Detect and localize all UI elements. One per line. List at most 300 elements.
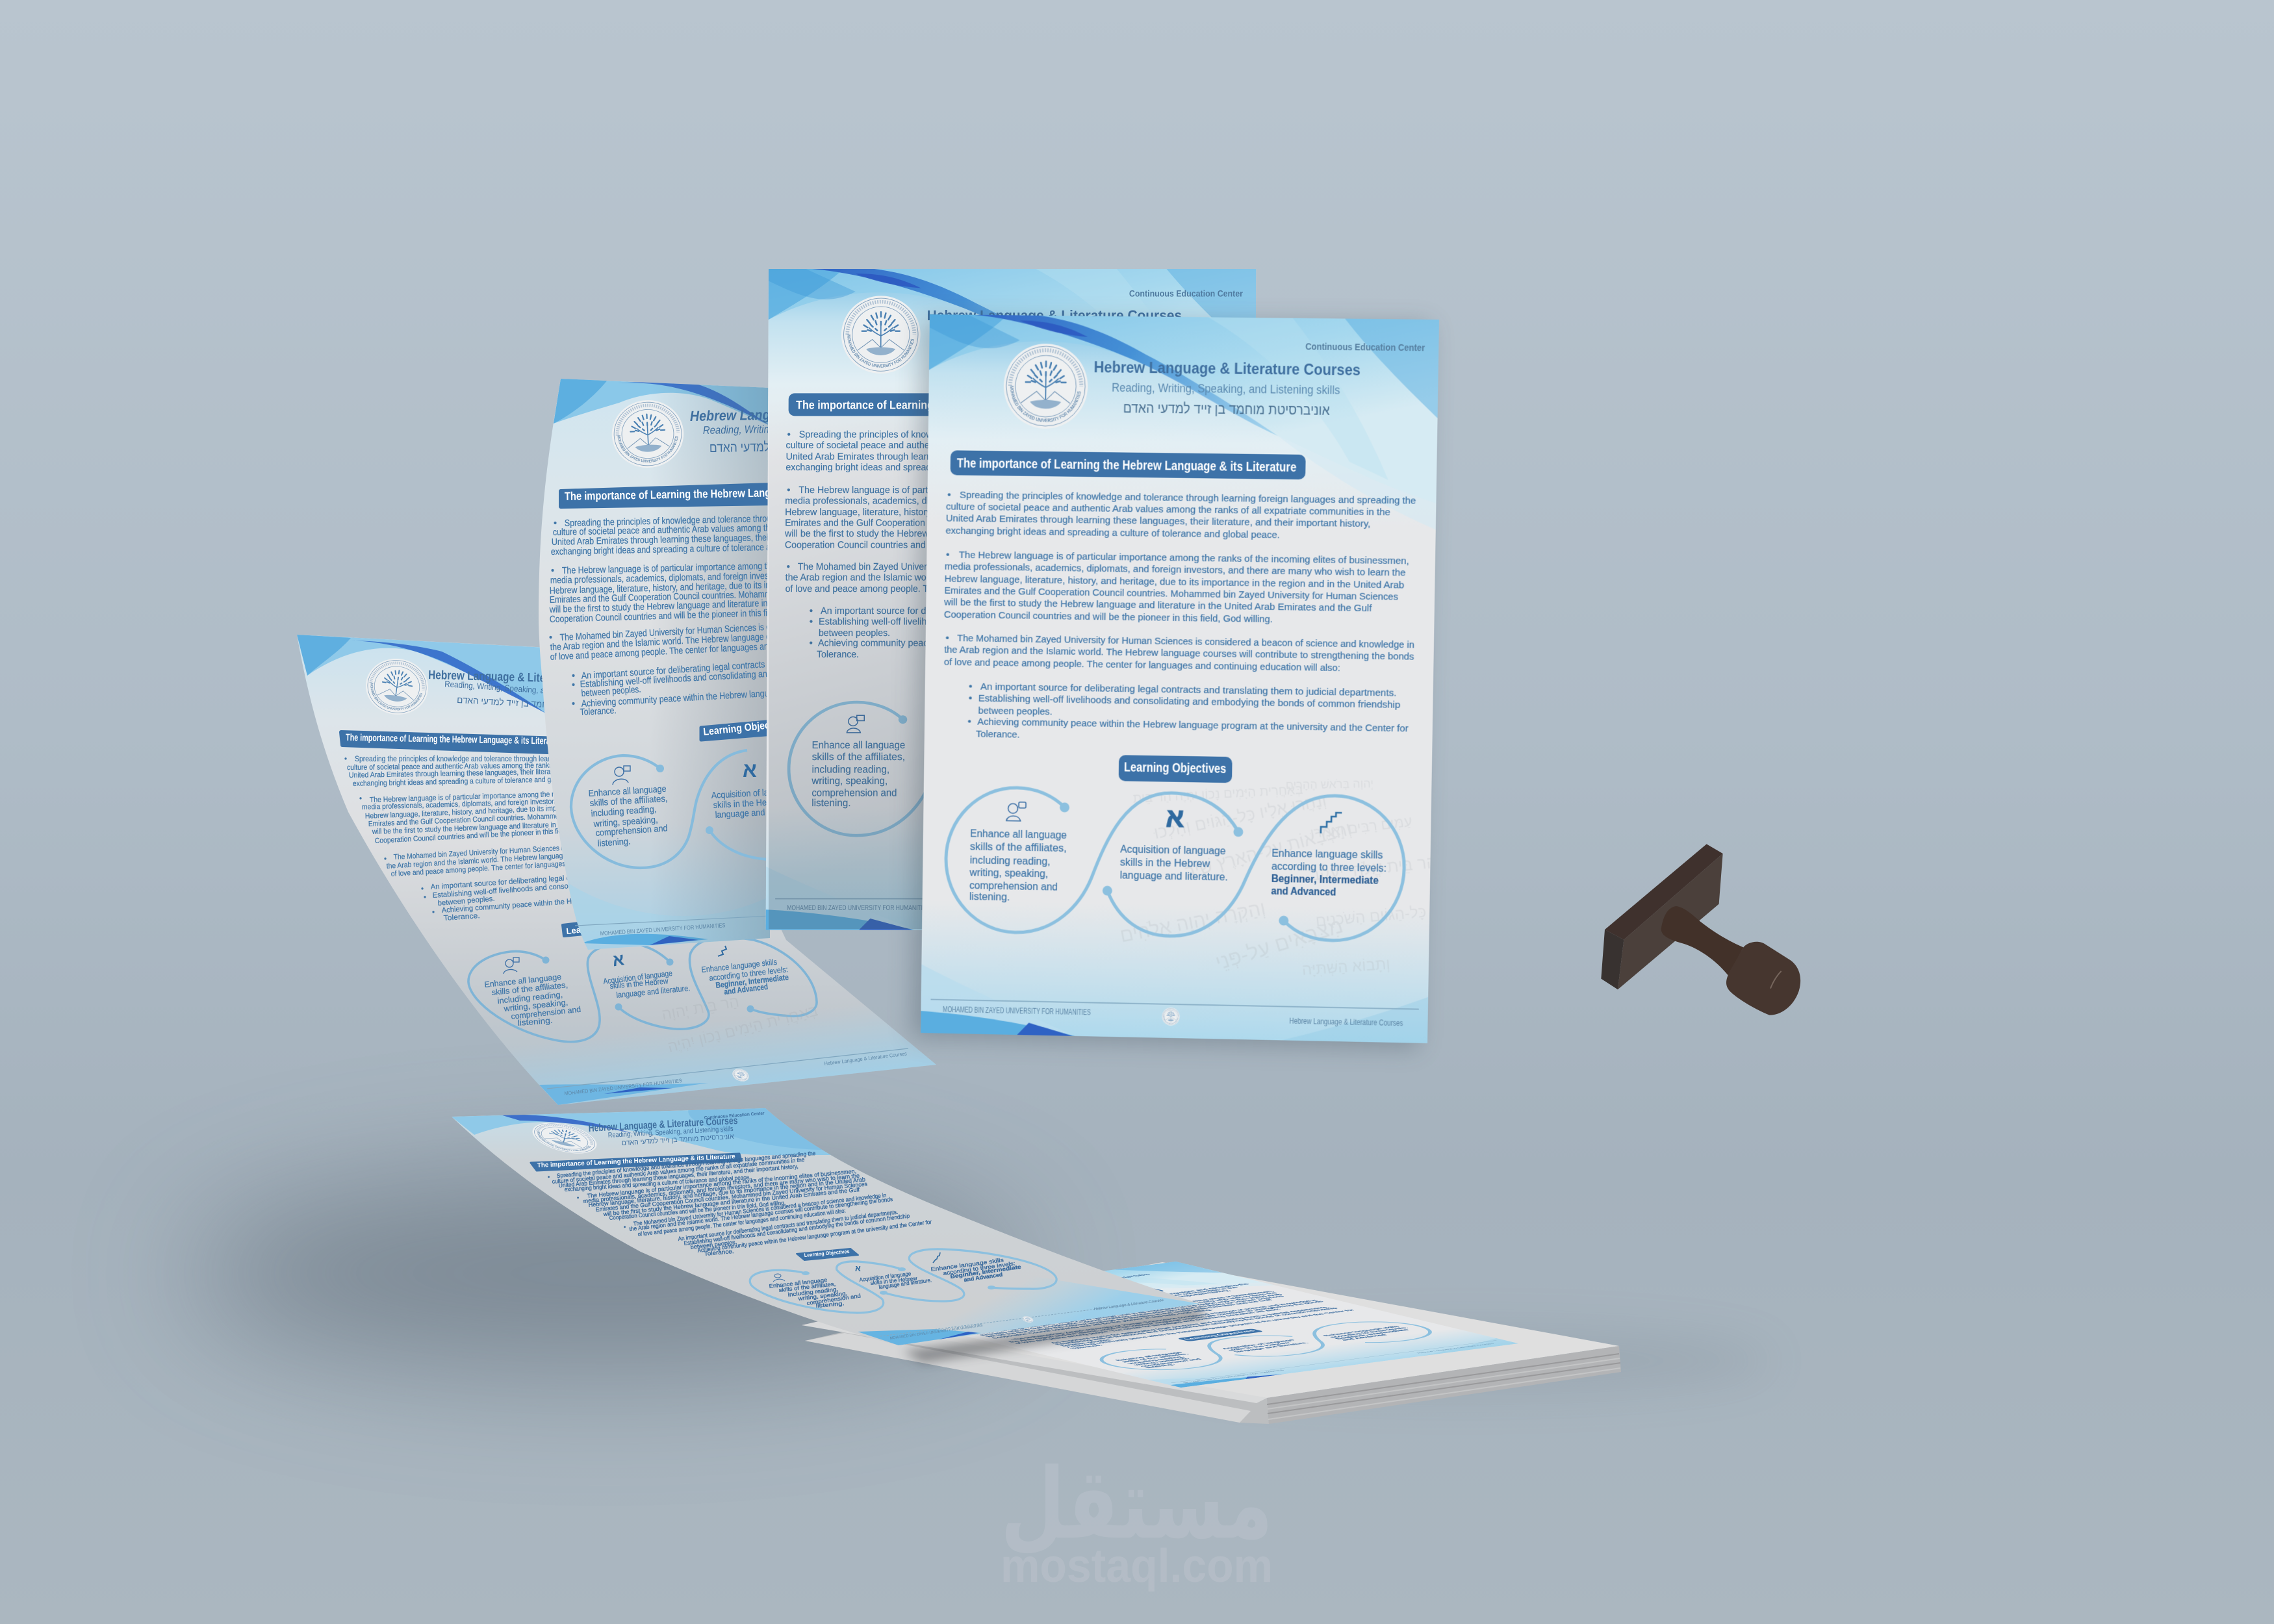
back sheet body text: will be the first to study the Hebrew language and literature in the United Arab Emirates and the Gulf (784, 528, 1195, 539)
left sheet body text: Cooperation Council countries and will be the pioneer in this field, God willing. (375, 825, 606, 845)
sheet body text (977, 1284, 1354, 1349)
left sheet body text: Emirates and the Gulf Cooperation Council countries. Mohammed bin Zayed University for Human Sciences (368, 807, 687, 828)
left sheet body text: of love and peace among people. The center for languages and continuing education will also: (390, 854, 669, 878)
second sheet body text: Spreading the principles of knowledge and tolerance through learning foreign languages and spreading the (565, 510, 943, 529)
objective 3 text: and Advanced (1270, 883, 1333, 896)
curved sheet body text (548, 1150, 932, 1257)
body text: The Hebrew language is of particular importance among the ranks of the incoming elites of businessmen, (960, 550, 1401, 564)
second sheet loop text: Acquisition of language (711, 785, 796, 800)
sheet: second from back, slightly curved (539, 379, 943, 950)
sheet body text: will be the first to study the Hebrew language and literature in the United Arab Emirates and the Gulf (984, 1299, 1275, 1338)
curved sheet seal (530, 1117, 600, 1159)
curved sheet loop text: skills of the affiliates, (778, 1280, 836, 1293)
left sheet footer: Hebrew Language & Literature Courses (824, 1050, 907, 1067)
curved sheet body text: United Arab Emirates through learning these languages, their literature, and their important history, (558, 1163, 798, 1189)
body text: Hebrew language, literature, history, and heritage, due to its importance in the region and in the United Arab (946, 574, 1397, 588)
sheet body text: The Hebrew language is of particular importance among the ranks of the incoming elites of businessmen, (971, 1290, 1276, 1331)
back sheet body text: Achieving community peace within the Hebrew language program at the university and the Center for (818, 638, 1231, 648)
back sheet body text: Tolerance. (817, 649, 859, 660)
sheet objectives text: skills of the affiliates, (1120, 1353, 1190, 1363)
body text: between peoples. (980, 707, 1053, 718)
back sheet footer: MOHAMED BIN ZAYED UNIVERSITY FOR HUMANITIES (787, 904, 930, 912)
objective 2 text: Acquisition of language (1121, 843, 1225, 857)
left sheet body text: An important source for deliberating legal contracts and translating them to judicial departments. (430, 863, 742, 891)
curved sheet loop text: Enhance all language (769, 1276, 828, 1289)
second sheet loop icons: א (743, 758, 757, 781)
back sheet artwork (766, 269, 1256, 930)
sheet objectives text: Beginner, Intermediate (1334, 1329, 1411, 1339)
back sheet body text: Establishing well-off livelihoods and consolidating and embodying the bonds of common friendship (819, 616, 1223, 627)
curved sheet loop text: language and literature. (878, 1276, 932, 1290)
left sheet body text: • (359, 795, 362, 803)
second sheet seal (610, 398, 685, 470)
second sheet loop text: comprehension and (595, 822, 668, 838)
back sheet titles: Hebrew Language & Literature Courses (927, 308, 1182, 324)
left sheet body text: between peoples. (437, 895, 495, 907)
sheet body text: Achieving community peace within the Hebrew language program at the university and the Center for (1064, 1309, 1357, 1348)
body text: of love and peace among people. The center for languages and continuing education will also: (946, 658, 1336, 672)
second sheet body text: culture of societal peace and authentic Arab values among the ranks of all expatriate communities in the (553, 520, 923, 538)
paper stack (802, 1262, 1621, 1424)
curved sheet objectives pill (797, 1249, 858, 1260)
curved sheet body text: Spreading the principles of knowledge and tolerance through learning foreign languages and spreading the (556, 1150, 816, 1179)
body text: • (971, 682, 974, 694)
curved sheet titles: Hebrew Language & Literature Courses (588, 1115, 738, 1134)
back sheet body text: • (810, 605, 813, 616)
second sheet body text: The Mohamed bin Zayed University for Human Sciences is considered a beacon of science and knowledge in (559, 613, 939, 643)
second sheet loop text: including reading, (591, 804, 657, 818)
sheet objectives text: writing, speaking, (1132, 1358, 1191, 1366)
hebrew script watermark: כָּל-הַגּוֹיִם הַשֹּׁכְנִים (1313, 900, 1423, 929)
body text: • (949, 490, 952, 501)
curved sheet loop text: Acquisition of language (859, 1270, 912, 1283)
body text: An important source for deliberating legal contracts and translating them to judicial departments. (982, 682, 1391, 696)
sheet objectives text: Acquisition of language (1220, 1339, 1297, 1350)
second sheet body text: • (551, 566, 554, 576)
left sheet body text: Spreading the principles of knowledge and tolerance through learning foreign languages and spreading the (355, 755, 674, 763)
left sheet body text: • (384, 856, 387, 863)
curved sheet header (452, 1108, 1200, 1345)
objective 3 text (1271, 847, 1387, 899)
sheet footer text: MOHAMED BIN ZAYED UNIVERSITY FOR HUMANITIES (1182, 1369, 1286, 1384)
left sheet faint hebrew: הַר בֵּית יְהוָה (660, 993, 741, 1024)
left sheet loop text: Acquisition of language (603, 969, 673, 986)
left sheet body text: • (424, 894, 426, 902)
sheet objectives text: including reading, (1127, 1356, 1186, 1364)
body text: Spreading the principles of knowledge and tolerance through learning foreign languages and spreading the (960, 490, 1408, 503)
sheet body text: Tolerance. (1069, 1344, 1105, 1350)
left sheet titles: אוניברסיטת מוחמד בן זייד למדעי האדם (457, 694, 602, 713)
curved sheet body text: Emirates and the Gulf Cooperation Council countries. Mohammed bin Zayed University for Human Sciences (595, 1180, 868, 1213)
left sheet body text: The Mohamed bin Zayed University for Human Sciences is considered a beacon of science and knowledge in (394, 836, 714, 861)
hebrew script watermark: יְהוָה בְּרֹאשׁ הֶהָרִים (1283, 774, 1369, 791)
sheet body text: exchanging bright ideas and spreading a culture of tolerance and global peace. (951, 1299, 1179, 1329)
second sheet body text: of love and peace among people. The center for languages and continuing education will also: (550, 636, 880, 663)
body text: • (970, 718, 973, 729)
sheet body text: culture of societal peace and authentic Arab values among the ranks of all expatriate communities in the (939, 1287, 1240, 1326)
second sheet titles: Reading, Writing, Speaking, and Listening skills (703, 421, 907, 437)
back sheet body text: • (787, 485, 791, 496)
left sheet body text: United Arab Emirates through learning these languages, their literature, and their important history, (349, 767, 646, 780)
hebrew university name: אוניברסיטת מוחמד בן זייד למדעי האדם (1121, 398, 1323, 416)
curved sheet footer (880, 1299, 1164, 1341)
second sheet titles: Hebrew Language & Literature Courses (690, 404, 930, 424)
curved sheet titles: Continuous Education Center (704, 1111, 765, 1121)
curved sheet body text: Achieving community peace within the Hebrew language program at the university and the Center for (697, 1219, 932, 1254)
flyer subtitle: Reading, Writing, Speaking, and Listening skills (1109, 379, 1333, 394)
second sheet loop text: writing, speaking, (593, 814, 658, 829)
curved sheet loop text: writing, speaking, (797, 1289, 848, 1302)
curved sheet loop (750, 1249, 1056, 1313)
sheet title: Hebrew Language & Literature Courses (968, 1273, 1153, 1298)
back sheet body text: • (787, 561, 790, 572)
left sheet loop text (484, 958, 789, 1028)
objective 2 text (1119, 843, 1229, 883)
objective 2 text: language and literature. (1121, 870, 1227, 883)
hebrew script watermark: עַמִּים רַבִּים וְאָמְרוּ (1306, 810, 1408, 840)
second sheet body text (549, 510, 943, 718)
body text: • (971, 694, 974, 705)
curved sheet body text: media professionals, academics, diplomats, and foreign investors, and there are many who wish to learn the (583, 1173, 860, 1204)
body text (941, 489, 1417, 747)
sheet objectives pill (1177, 1328, 1264, 1341)
curved sheet heading: The importance of Learning the Hebrew Language & its Literature (537, 1153, 735, 1169)
hebrew script watermark: וְהַצְּבָאוֹת עַל-הָאָרֶץ שִׁיר (1183, 816, 1350, 882)
flyer title: Hebrew Language & Literature Courses (1092, 358, 1353, 377)
left sheet body text: culture of societal peace and authentic Arab values among the ranks of all expatriate communities in the (347, 761, 659, 772)
left sheet loop text: writing, speaking, (503, 998, 568, 1013)
back sheet body text: Cooperation Council countries and will be the pioneer in this field, God willing. (785, 540, 1101, 551)
learning objectives pill (1119, 755, 1233, 783)
curved sheet body text: An important source for deliberating legal contracts and translating them to judicial departments. (678, 1209, 899, 1242)
second sheet titles: אוניברסיטת מוחמד בן זייד למדעי האדם (709, 438, 895, 455)
curved sheet loop text: according to three levels: (943, 1260, 1016, 1276)
sheet objectives text: Enhance language skills (1322, 1326, 1401, 1337)
sheet objectives text: Enhance all language (1114, 1351, 1184, 1362)
sheet body text: Hebrew language, literature, history, and heritage, due to its importance in the region and in the United Arab (973, 1293, 1284, 1335)
back sheet heading: The importance of Learning the Hebrew Language & its Literature (796, 398, 1122, 411)
second sheet body text: Hebrew language, literature, history, and heritage, due to its importance in the region and in the United Arab (550, 576, 932, 596)
sheet body text: of love and peace among people. The center for languages and continuing education will also: (1013, 1308, 1283, 1344)
left sheet titles (428, 668, 617, 713)
heading pill: The importance of Learning the Hebrew Language & its Literature (958, 457, 1291, 473)
footer: Hebrew Language & Literature Courses (1288, 1016, 1400, 1026)
left sheet body text (344, 755, 766, 922)
left sheet body text: The Hebrew language is of particular importance among the ranks of the incoming elites of businessmen, (370, 787, 685, 804)
second sheet body text: Establishing well-off livelihoods and consolidating and embodying the bonds of common friendship (580, 660, 930, 690)
left sheet loop text: Enhance all language (484, 972, 562, 989)
icon: wooden stamp (1601, 844, 1800, 1015)
curved sheet loop text: Enhance language skills (930, 1256, 1004, 1273)
curved sheet loop text: and Advanced (964, 1271, 1003, 1283)
second sheet body text: The Hebrew language is of particular importance among the ranks of the incoming elites of businessmen, (562, 557, 936, 576)
curved sheet titles: אוניברסיטת מוחמד בן זייד למדעי האדם (621, 1132, 734, 1147)
left sheet body text: Tolerance. (443, 912, 480, 922)
second sheet loop text: language and literature. (715, 805, 802, 820)
left sheet loop text: according to three levels: (709, 965, 789, 983)
curved sheet footer: Hebrew Language & Literature Courses (1093, 1299, 1164, 1312)
body text: Cooperation Council countries and will be the pioneer in this field, God willing. (945, 610, 1269, 623)
back sheet body text: Emirates and the Gulf Cooperation Council countries. Mohammed bin Zayed University for Human Sciences (785, 518, 1220, 529)
back sheet titles (927, 288, 1244, 324)
left sheet body text: Achieving community peace within the Hebrew language program at the university and the Center for (441, 884, 766, 915)
left sheet loop text: including reading, (497, 990, 563, 1006)
curved sheet body text: The Mohamed bin Zayed University for Human Sciences is considered a beacon of science and knowledge in (633, 1192, 887, 1227)
curved sheet body text: Tolerance. (704, 1248, 734, 1257)
curved sheet body text: The Hebrew language is of particular importance among the ranks of the incoming elites of businessmen, (587, 1168, 856, 1199)
second sheet loop icons (613, 758, 757, 785)
left sheet loop text: language and literature. (616, 983, 691, 1000)
left sheet heading: The importance of Learning the Hebrew Language & its Literature (346, 732, 563, 747)
curved sheet body text: • (624, 1224, 626, 1230)
back sheet body text: The Hebrew language is of particular importance among the ranks of the incoming elites of businessmen, (798, 485, 1231, 496)
objective 3 text: according to three levels: (1270, 859, 1383, 872)
sheet body text: media professionals, academics, diplomats, and foreign investors, and there are many who wish to learn the (967, 1292, 1279, 1334)
curved sheet body text: exchanging bright ideas and spreading a culture of tolerance and global peace. (564, 1174, 751, 1193)
hebrew script watermark: וְנָהֲרוּ אֵלָיו כָּל-הַגּוֹיִם וְהָלְכוּ (1152, 789, 1325, 843)
university seal (1003, 343, 1088, 429)
body text: culture of societal peace and authentic Arab values among the ranks of all expatriate communities in the (947, 501, 1383, 515)
back sheet loop text: comprehension and (811, 788, 897, 798)
left sheet loop icons: א (611, 949, 626, 970)
shadow of curved sheet on flat sheet (903, 1308, 1208, 1363)
second sheet body text: between peoples. (581, 685, 641, 699)
watermark logo: مستقل (1001, 1448, 1273, 1561)
back sheet body text: • (810, 616, 813, 627)
left sheet loop text: Beginner, Intermediate (715, 972, 789, 990)
body text: Emirates and the Gulf Cooperation Council countries. Mohammed bin Zayed University for Human Sciences (946, 586, 1392, 600)
ground shadow under sheets (188, 1176, 1774, 1393)
curved sheet body text: • (577, 1195, 579, 1201)
sheet body text: between peoples. (1059, 1339, 1115, 1347)
second sheet body text: • (572, 671, 575, 681)
body text: the Arab region and the Islamic world. The Hebrew language courses will contribute to strengthening the bonds (946, 646, 1408, 659)
sheet footer text: Hebrew Language & Literature Courses (1416, 1343, 1496, 1354)
sheet body text: the Arab region and the Islamic world. The Hebrew language courses will contribute to strengthening the bonds (1007, 1300, 1325, 1343)
back sheet loop text: writing, speaking, (811, 776, 888, 787)
back sheet person icon (847, 715, 864, 733)
objective 1 text (969, 827, 1067, 904)
learning objectives pill: Learning Objectives (1124, 759, 1225, 776)
hebrew script watermark: וְהַקְּרָה יְהוָה אֱלֹהִים (1119, 896, 1266, 948)
second sheet body text: media professionals, academics, diplomats, and foreign investors, and there are many who wish to learn the (550, 568, 934, 586)
back sheet titles: Continuous Education Center (1129, 288, 1244, 298)
hebrew script watermark (1118, 773, 1440, 982)
body text: United Arab Emirates through learning these languages, their literature, and their important history, (947, 513, 1364, 527)
curved sheet loop icons (773, 1252, 940, 1282)
left sheet heading (341, 732, 585, 754)
second sheet body text: will be the first to study the Hebrew language and literature in the United Arab Emirates and the Gulf (549, 594, 906, 615)
back sheet heading (789, 393, 1134, 416)
back sheet body text: exchanging bright ideas and spreading a culture of tolerance and global peace. (786, 462, 1106, 473)
second sheet objectives pill: Learning Objectives (703, 718, 791, 738)
left sheet loop text: listening. (517, 1016, 553, 1028)
left sheet loop icons (504, 946, 726, 974)
sheet body text: Emirates and the Gulf Cooperation Council countries. Mohammed bin Zayed University for Human Sciences (978, 1295, 1286, 1336)
back sheet loop text (811, 740, 905, 809)
left sheet body text: • (432, 909, 435, 917)
back sheet body text: between peoples. (819, 628, 890, 639)
heading pill (951, 450, 1306, 479)
sheet objectives text: skills in the Hebrew (1227, 1342, 1293, 1351)
second sheet loop text (588, 783, 802, 848)
second sheet body text: Achieving community peace within the Hebrew language program at the university and the Center for (581, 679, 939, 709)
sheet: far left curved (297, 635, 936, 1105)
objective 1 text: writing, speaking, (972, 869, 1051, 882)
second sheet body text: Cooperation Council countries and will be the pioneer in this field, God willing. (550, 606, 824, 625)
curved sheet titles: Reading, Writing, Speaking, and Listening skills (608, 1125, 734, 1139)
back sheet body text: of love and peace among people. The center for languages and continuing education will also: (786, 583, 1166, 594)
back sheet body text: culture of societal peace and authentic Arab values among the ranks of all expatriate communities in the (786, 440, 1212, 451)
back sheet loop text: skills of the affiliates, (812, 752, 905, 763)
second sheet artwork (539, 379, 770, 950)
left sheet body text: Hebrew language, literature, history, and heritage, due to its importance in the region and in the United Arab (365, 799, 687, 820)
objective 1 text: including reading, (973, 856, 1053, 869)
body text: media professionals, academics, diplomats, and foreign investors, and there are many who wish to learn the (946, 562, 1398, 576)
second sheet loop text: skills in the Hebrew (713, 796, 786, 810)
sheet footer text (1171, 1340, 1505, 1385)
back sheet loop text: including reading, (811, 765, 889, 775)
body text: Tolerance. (978, 730, 1021, 742)
body text: The Mohamed bin Zayed University for Human Sciences is considered a beacon of science and knowledge in (959, 634, 1407, 648)
left sheet footer: MOHAMED BIN ZAYED UNIVERSITY FOR HUMANITIES (564, 1078, 682, 1097)
second sheet body text: An important source for deliberating legal contracts and translating them to judicial departments. (581, 650, 927, 681)
sheet objectives text: language and literature. (1233, 1342, 1310, 1352)
curved sheet loop text: Beginner, Intermediate (950, 1263, 1022, 1280)
sheet objectives text (1113, 1324, 1427, 1369)
left sheet loop text: skills of the affiliates, (491, 980, 568, 997)
second sheet body text: the Arab region and the Islamic world. The Hebrew language courses will contribute to strengthening the bonds (550, 624, 941, 653)
back sheet body text: Spreading the principles of knowledge and tolerance through learning foreign languages and spreading the (799, 429, 1236, 440)
watermark logo (1001, 1448, 1273, 1592)
sheet body text: Cooperation Council countries and will be the pioneer in this field, God willing. (990, 1309, 1215, 1339)
curved sheet body text: Cooperation Council countries and will be the pioneer in this field, God willing. (609, 1199, 786, 1221)
curved sheet body text: • (548, 1174, 550, 1180)
curved sheet body text: Hebrew language, literature, history, and heritage, due to its importance in the region and in the United Arab (588, 1176, 865, 1208)
back sheet body text: • (810, 638, 813, 648)
left sheet titles: Reading, Writing, Speaking, and Listening skills (444, 679, 605, 700)
left sheet body text: exchanging bright ideas and spreading a culture of tolerance and global peace. (353, 775, 587, 788)
sheet: flat back sheet (766, 269, 1256, 930)
curved sheet footer: MOHAMED BIN ZAYED UNIVERSITY FOR HUMANITIES (889, 1324, 983, 1341)
second sheet body text: • (554, 518, 557, 529)
left sheet body text: • (421, 885, 424, 893)
hebrew script watermark: מִצְּבָאִים עַל-פְּנֵי (1213, 912, 1343, 975)
body text: exchanging bright ideas and spreading a culture of tolerance and global peace. (947, 526, 1275, 539)
left sheet loop text: skills in the Hebrew (609, 976, 669, 991)
second sheet body text: Emirates and the Gulf Cooperation Council countries. Mohammed bin Zayed University for Human Sciences (550, 585, 927, 605)
left sheet body text: will be the first to study the Hebrew language and literature in the United Arab Emirates and the Gulf (372, 817, 673, 836)
sheet body text: An important source for deliberating legal contracts and translating them to judicial departments. (1049, 1306, 1331, 1344)
second sheet body text: • (572, 680, 575, 691)
icon: person speaking (1006, 802, 1026, 821)
left sheet body text: Establishing well-off livelihoods and consolidating and embodying the bonds of common friendship (432, 870, 749, 900)
curved sheet loop text: listening. (815, 1300, 845, 1309)
curved sheet body text: between peoples. (690, 1239, 737, 1250)
left sheet body text: • (344, 755, 347, 763)
body text: • (947, 634, 951, 645)
second sheet loop text: skills of the affiliates, (589, 793, 668, 808)
hebrew script watermark: בְּאַחֲרִית הַיָּמִים נָכוֹן יִהְיֶה הַר בֵּית (1133, 781, 1301, 806)
curved sheet loop text (769, 1256, 1022, 1309)
curved sheet objectives pill: Learning Objectives (804, 1249, 850, 1258)
sheet objectives text: and Advanced (1340, 1334, 1388, 1341)
sheet body text: United Arab Emirates through learning these languages, their literature, and their important history, (945, 1289, 1233, 1328)
back sheet loop text: Enhance all language (812, 740, 905, 751)
back sheet body text (784, 429, 1237, 660)
stamp block (1601, 844, 1723, 989)
curved sheet body text: culture of societal peace and authentic Arab values among the ranks of all expatriate communities in the (552, 1156, 805, 1185)
objective 1 text: comprehension and (973, 882, 1060, 895)
left sheet loop text: Enhance language skills (701, 958, 778, 974)
hebrew script watermark: הַר בֵּית אֱלֹהֵי יַעֲקֹב (1307, 850, 1433, 883)
second sheet heading (561, 485, 863, 507)
second sheet heading: The importance of Learning the Hebrew Language & its Literature (565, 485, 863, 503)
sheet body text: The Mohamed bin Zayed University for Human Sciences is considered a beacon of science and knowledge in (1010, 1299, 1320, 1340)
body text: Achieving community peace within the Hebrew language program at the university and the Center for (979, 718, 1403, 731)
curved sheet body text: the Arab region and the Islamic world. The Hebrew language courses will contribute to strengthening the bonds (629, 1196, 893, 1232)
sheet artwork (967, 1262, 1518, 1388)
objective 2 text: skills in the Hebrew (1121, 857, 1210, 870)
left sheet titles: Hebrew Language & Literature Courses (428, 668, 617, 687)
second sheet body text: exchanging bright ideas and spreading a culture of tolerance and global peace. (551, 541, 829, 557)
back sheet body text: The Mohamed bin Zayed University for Human Sciences is considered a beacon of science and knowledge in (798, 561, 1236, 572)
left sheet seal (362, 655, 432, 718)
second sheet body text: • (572, 699, 575, 709)
curved sheet body text: Establishing well-off livelihoods and consolidating and embodying the bonds of common friendship (683, 1212, 910, 1247)
icon: stairs (1321, 813, 1342, 833)
front flyer background artwork (921, 314, 1439, 1043)
shadow cast on back sheet (769, 390, 931, 929)
left sheet artwork (297, 635, 936, 1105)
stamp handle (1661, 906, 1800, 1015)
second sheet body text: • (549, 633, 552, 643)
curved sheet loop text: including reading, (787, 1286, 839, 1298)
footer (930, 1000, 1419, 1030)
sheet seal (901, 1295, 998, 1312)
back sheet body text: United Arab Emirates through learning these languages, their literature, and their important history, (786, 451, 1193, 462)
second sheet titles (690, 404, 930, 455)
second sheet body text: United Arab Emirates through learning these languages, their literature, and their important history, (552, 530, 905, 548)
curved sheet titles (588, 1111, 765, 1147)
back sheet body text: the Arab region and the Islamic world. The Hebrew language courses will contribute to strengthening the bonds (786, 572, 1236, 583)
objective 3 text: Enhance language skills (1270, 846, 1379, 859)
objectives serpentine loop (945, 787, 1405, 942)
second sheet footer: MOHAMED BIN ZAYED UNIVERSITY FOR HUMANITIES (600, 922, 726, 937)
curved sheet loop text: comprehension and (806, 1292, 862, 1306)
back sheet loop text: listening. (811, 798, 851, 809)
back sheet loop (789, 702, 1006, 835)
body text: will be the first to study the Hebrew language and literature in the United Arab Emirates and the Gulf (945, 598, 1366, 611)
icon: hebrew aleph: א (1166, 802, 1184, 833)
second sheet loop (571, 750, 773, 868)
curved sheet loop icons: א (855, 1263, 861, 1273)
body text: • (947, 550, 951, 561)
second sheet loop text: Enhance all language (588, 783, 667, 798)
objective 1 text: skills of the affiliates, (973, 843, 1068, 856)
sheet: curved, landing (452, 1108, 1200, 1345)
back sheet body text: An important source for deliberating legal contracts and translating them to judicial departments. (821, 605, 1220, 616)
footer: MOHAMED BIN ZAYED UNIVERSITY FOR HUMANITIES (947, 1009, 1093, 1019)
left sheet objectives pill: Learning Objectives (566, 918, 647, 936)
left sheet faint hebrew: בְּאַחֲרִית הַיָּמִים נָכוֹן יִהְיֶה (666, 1002, 820, 1056)
left sheet body text: media professionals, academics, diplomats, and foreign investors, and there are many who wish to learn the (362, 794, 685, 811)
sheet objectives text: according to three levels: (1328, 1326, 1410, 1338)
objective 1 text: Enhance all language (973, 830, 1068, 843)
sheet objectives pill: Learning Objectives (1182, 1330, 1257, 1340)
sheet objectives text: listening. (1144, 1364, 1177, 1369)
watermark url: mostaql.com (1001, 1540, 1273, 1592)
